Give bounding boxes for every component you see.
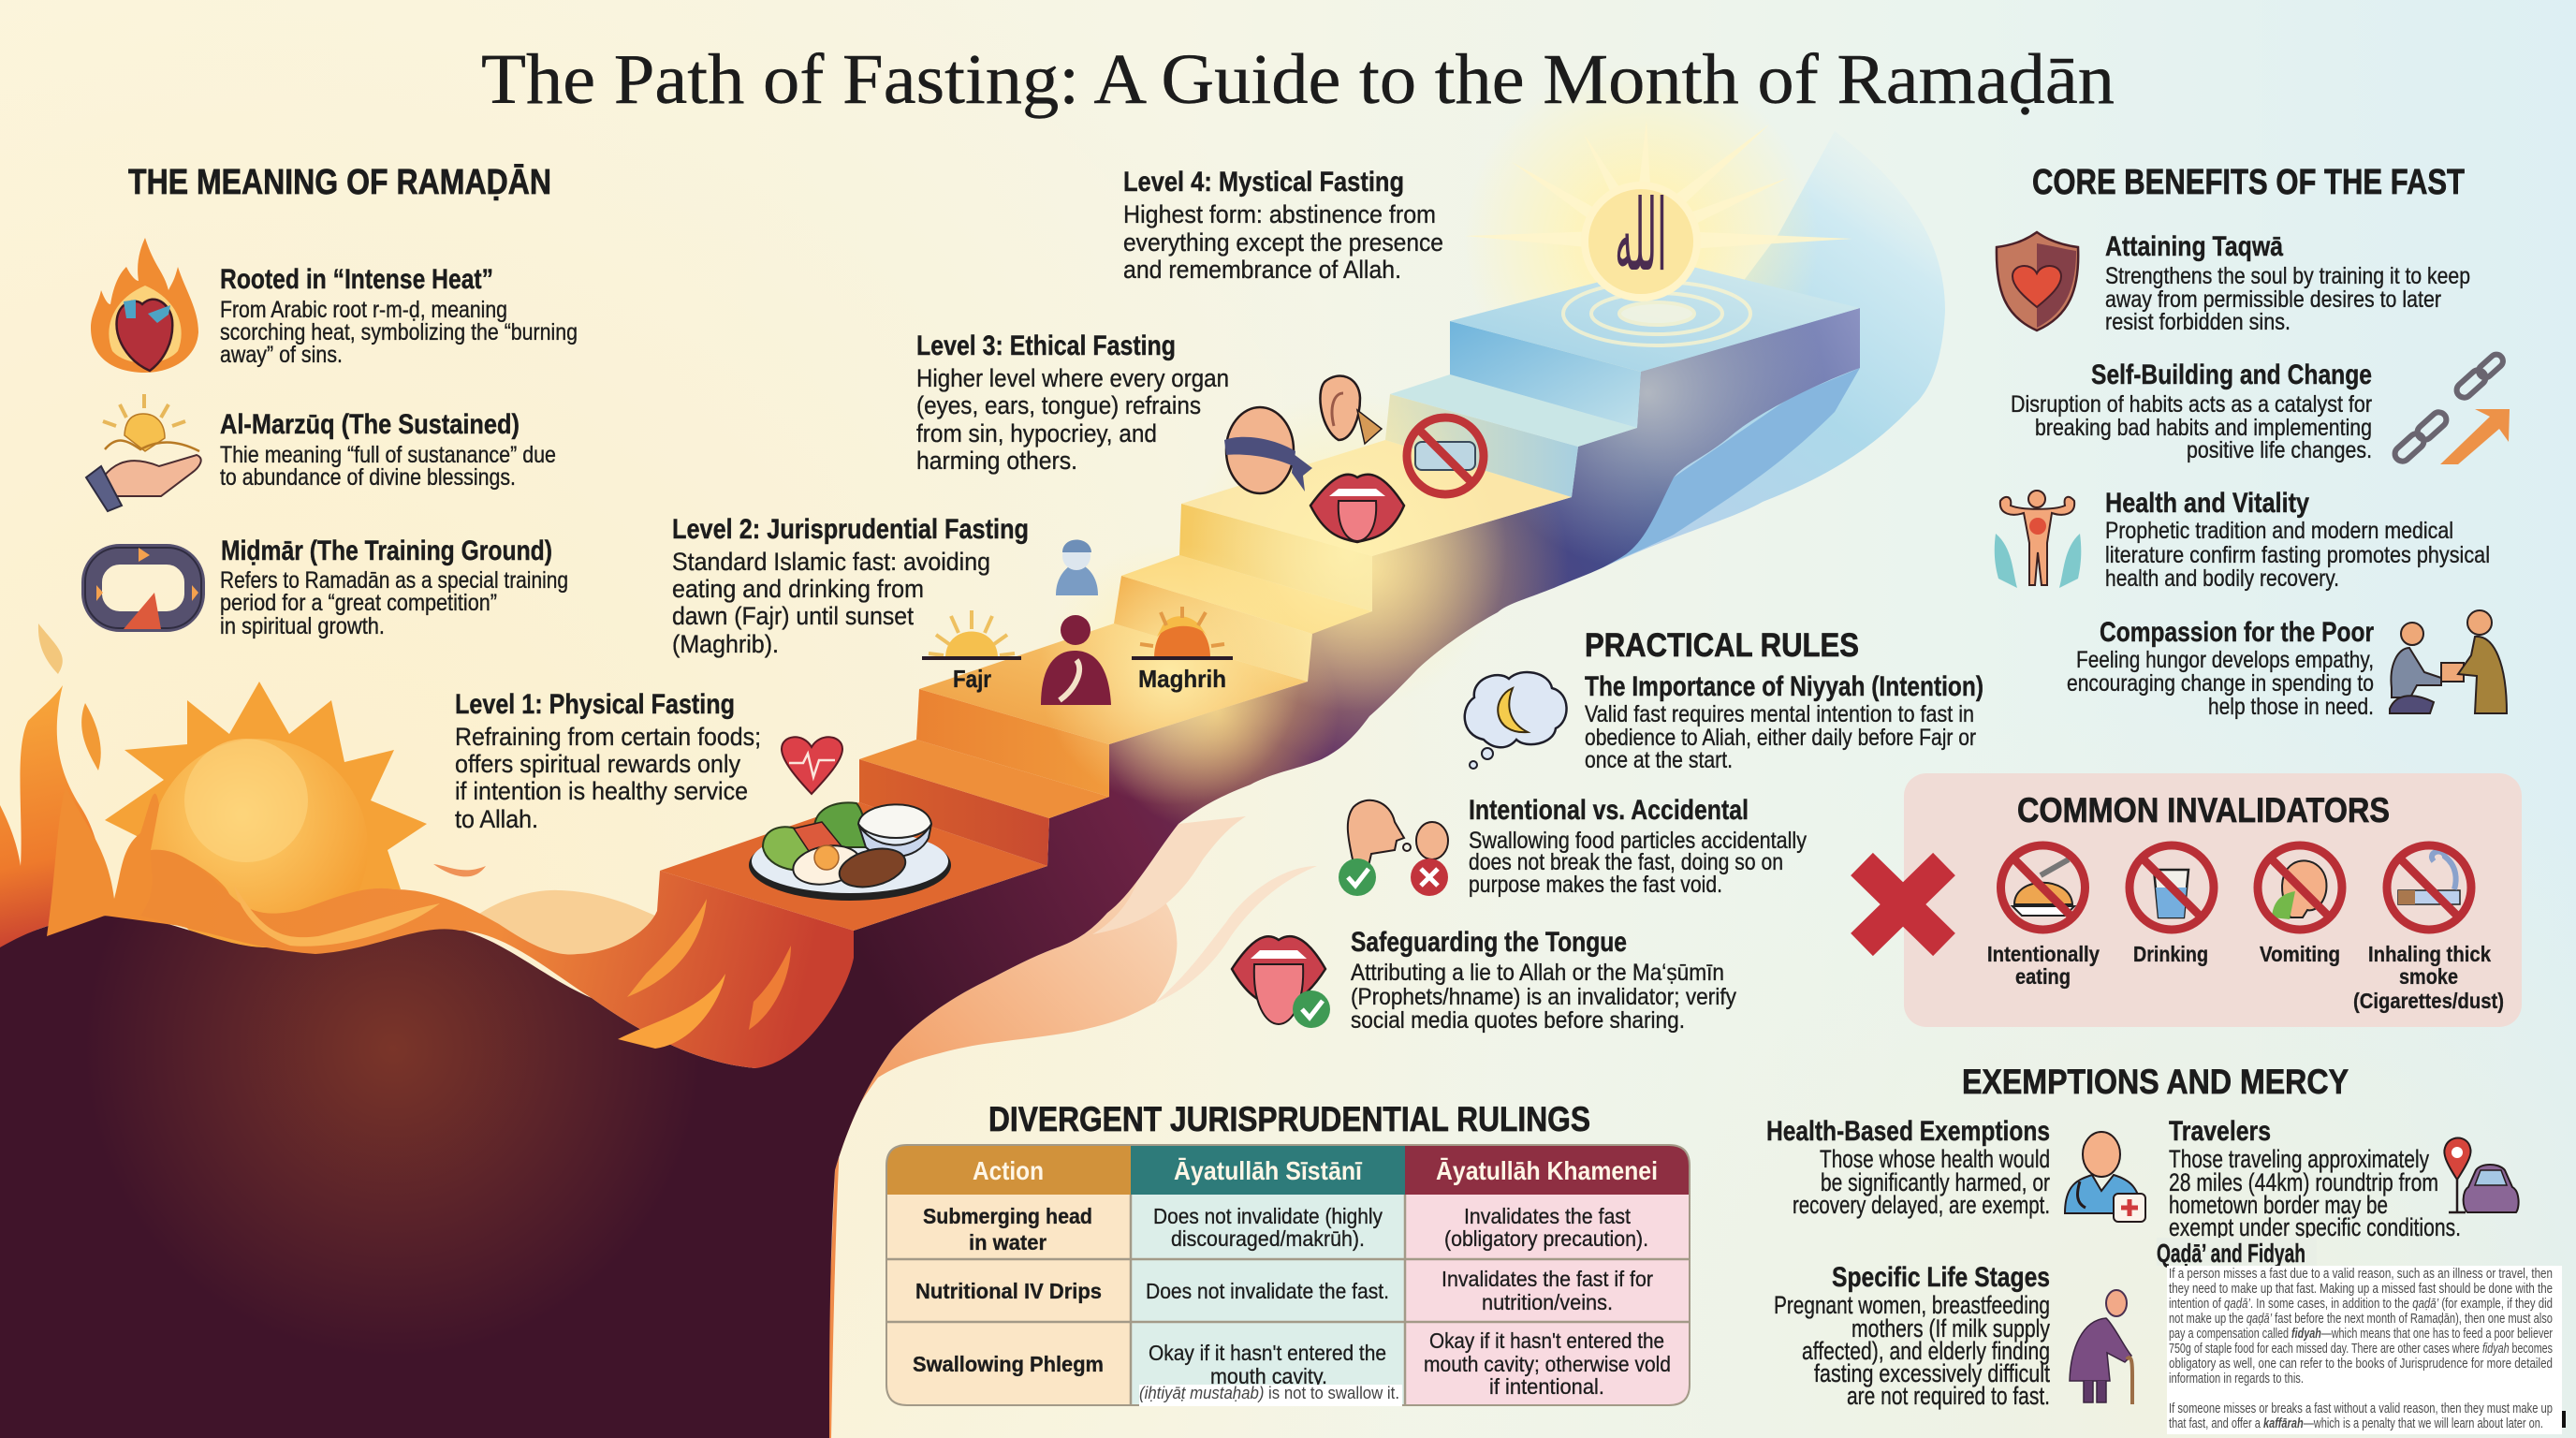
- icon: plate of food: [749, 802, 951, 901]
- block: midmar: Miḍmār (The Training Ground): [221, 536, 552, 566]
- title: The Path of Fasting: A Guide to the Month of Ramaḍān: [481, 40, 2115, 119]
- heading: DIVERGENT JURISPRUDENTIAL RULINGS: [988, 1100, 1590, 1138]
- block: level 1: if intention is healthy service: [455, 777, 748, 805]
- block: intentional vs accidental: does not break the fast, doing so on: [1469, 849, 1783, 875]
- panel: divergent rulings table: [886, 1100, 1690, 1406]
- step 5: [1179, 440, 1572, 611]
- row: submerging head: Invalidates the fast: [1464, 1204, 1632, 1228]
- block: travelers: Those traveling approximately: [2169, 1145, 2429, 1173]
- block: level 3: harming others.: [916, 447, 1077, 475]
- block: rooted in intense heat: From Arabic root r-m-ḍ, meaning: [220, 297, 507, 323]
- block: self-building: positive life changes.: [2187, 437, 2372, 463]
- block: level 4: Level 4: Mystical Fasting: [1123, 167, 1404, 198]
- icon: large red cross: [1862, 864, 1944, 945]
- block: safeguarding the tongue: Safeguarding the Tongue: [1351, 927, 1627, 958]
- block: level 2: Standard Islamic fast: avoiding: [672, 548, 990, 576]
- block: health: health and bodily recovery.: [2105, 565, 2339, 592]
- step 1: [660, 802, 1047, 931]
- block: travelers: [2169, 1116, 2461, 1241]
- note: recommended precaution patch: (iḥtiyāṭ mustaḥab) is not to swallow it.: [1139, 1384, 1399, 1402]
- block: health: literature confirm fasting promotes physical: [2105, 542, 2490, 568]
- block: niyyah: obedience to Aliah, either daily before Fajr or: [1585, 725, 1976, 751]
- note: white box on qada and fidyah: information in regards to this.: [2169, 1371, 2304, 1387]
- block: taqwa: Attaining Taqwā: [2105, 231, 2283, 262]
- block: level 2: eating and drinking from: [672, 575, 924, 603]
- text: intentionally eating: Intentionally: [1987, 942, 2100, 966]
- block: level 2: [672, 514, 1029, 658]
- illustration: blue swoosh behind stairs: [1554, 131, 1945, 588]
- block: specific life stages: affected), and elderly finding: [1802, 1337, 2050, 1365]
- block: taqwa: away from permissible desires to later: [2105, 286, 2441, 313]
- block: self-building: [2011, 360, 2372, 463]
- block: level 1: to Allah.: [455, 805, 538, 833]
- block: safeguarding the tongue: social media quotes before sharing.: [1351, 1007, 1685, 1034]
- heading: PRACTICAL RULES: [1585, 627, 1859, 664]
- note: white box on qada and fidyah: [2167, 1266, 2562, 1434]
- block: health: Prophetic tradition and modern medical: [2105, 518, 2453, 544]
- row: submerging head: in water: [969, 1230, 1046, 1255]
- panel: exemptions and mercy: [1766, 1063, 2566, 1434]
- row: nutritional IV drips: [915, 1267, 1653, 1314]
- text: intentionally eating: [1987, 942, 2100, 989]
- row: swallowing phlegm: mouth cavity; otherwise vold: [1424, 1352, 1671, 1376]
- icon: Fajr sun: Fajr: [953, 665, 991, 693]
- block: specific life stages: are not required to fast.: [1847, 1382, 2050, 1410]
- block: level 3: [916, 330, 1229, 475]
- block: travelers: 28 miles (44km) roundtrip from: [2169, 1168, 2438, 1196]
- block: level 1: [455, 689, 761, 833]
- icon: Allah medallion: [1585, 178, 1697, 298]
- row: swallowing phlegm: Okay if it hasn't entered the: [1429, 1328, 1664, 1353]
- block: rooted in intense heat: scorching heat, symbolizing the “burning: [220, 319, 578, 345]
- table header: [973, 1156, 1658, 1185]
- text: intentionally eating: eating: [2015, 964, 2071, 989]
- icon: shield: [1997, 232, 2078, 330]
- block: travelers: hometown border may be: [2169, 1191, 2388, 1219]
- icon: praying person: [1041, 615, 1111, 705]
- block: health: [2105, 488, 2490, 592]
- block: self-building: breaking bad habits and implementing: [2035, 415, 2372, 441]
- block: level 3: (eyes, ears, tongue) refrains: [916, 391, 1201, 419]
- illustration: flames: [0, 685, 229, 947]
- block: health-based exemptions: Those whose health would: [1820, 1145, 2050, 1173]
- icon: mouth with check: [1232, 936, 1330, 1028]
- row: submerging head: (obligatory precaution).: [1444, 1226, 1648, 1251]
- icon: giving to the poor: [2390, 610, 2507, 713]
- block: taqwa: resist forbidden sins.: [2105, 309, 2291, 335]
- block: intentional vs accidental: [1469, 795, 1807, 898]
- block: compassion: Feeling hungor develops empathy,: [2076, 647, 2374, 673]
- block: travelers: exempt under specific conditions.: [2169, 1213, 2461, 1241]
- block: taqwa: [2105, 231, 2470, 335]
- step 7: [1450, 262, 1860, 428]
- icon: no smoking: [2387, 845, 2471, 930]
- row: nutritional IV drips: nutrition/veins.: [1482, 1290, 1613, 1314]
- block: level 4: and remembrance of Allah.: [1123, 256, 1401, 284]
- table grid: [886, 1145, 1690, 1405]
- block: rooted in intense heat: away” of sins.: [220, 342, 343, 368]
- text: vomiting: Vomiting: [2260, 942, 2340, 966]
- icon: pin and car: [2444, 1138, 2519, 1212]
- block: compassion: help those in need.: [2208, 694, 2374, 720]
- icon: medic: [2065, 1132, 2145, 1222]
- block: specific life stages: fasting excessively difficult: [1814, 1359, 2050, 1387]
- text: drinking: Drinking: [2133, 942, 2208, 966]
- panel: practical rules: [1232, 627, 1983, 1034]
- patch: grey strip behind Qada heading: [2157, 1238, 2317, 1266]
- block: health-based exemptions: [1766, 1116, 2050, 1219]
- icon: race track: [85, 548, 201, 629]
- heading: THE MEANING OF RAMAḌĀN: [128, 163, 551, 202]
- illustration: orange flame flow: [38, 624, 854, 1068]
- illustration: staircase: [660, 262, 1860, 931]
- row: swallowing phlegm: [913, 1328, 1671, 1399]
- block: level 1: Level 1: Physical Fasting: [455, 689, 735, 720]
- block: level 1: Refraining from certain foods;: [455, 723, 761, 751]
- block: midmar: period for a “great competition”: [220, 590, 497, 616]
- icon: mouth with tongue: [1310, 475, 1404, 542]
- row: submerging head: [923, 1204, 1648, 1255]
- heading: CORE BENEFITS OF THE FAST: [2032, 163, 2465, 202]
- block: al-marzuq: to abundance of divine blessings.: [220, 464, 516, 491]
- heading: Qada and Fidyah: Qaḍā’ and Fidyah: [2157, 1239, 2305, 1268]
- heading: EXEMPTIONS AND MERCY: [1962, 1063, 2349, 1101]
- row: submerging head: discouraged/makrūh).: [1171, 1226, 1365, 1251]
- block: travelers: Travelers: [2169, 1116, 2271, 1147]
- block: level 3: Higher level where every organ: [916, 364, 1229, 392]
- step 2: [859, 740, 1109, 866]
- block: midmar: Refers to Ramadān as a special training: [220, 567, 568, 594]
- icon: heart in flame: [91, 238, 198, 373]
- note: white box on qada and fidyah: intention of qaḍā’. In some cases, in addition to the qaḍā’ (for example, if they did: [2169, 1296, 2553, 1312]
- block: health: Health and Vitality: [2105, 488, 2309, 519]
- block: specific life stages: Pregnant women, breastfeeding: [1774, 1291, 2050, 1319]
- block: midmar: [220, 536, 568, 639]
- block: level 2: dawn (Fajr) until sunset: [672, 602, 914, 630]
- text: inhaling thick smoke: Inhaling thick: [2368, 942, 2491, 966]
- illustration: sun at the base: [105, 682, 427, 956]
- panel: meaning of Ramadan: [85, 163, 578, 639]
- block: health-based exemptions: Health-Based Exemptions: [1766, 1116, 2050, 1147]
- icon: no drinking: [2130, 845, 2214, 930]
- icon: no vomiting: [2258, 845, 2342, 930]
- block: intentional vs accidental: Intentional vs. Accidental: [1469, 795, 1749, 826]
- icon: two heads with check and cross: [1339, 800, 1448, 896]
- block: safeguarding the tongue: (Prophets/hname) is an invalidator; verify: [1351, 984, 1736, 1010]
- block: level 3: from sin, hypocriey, and: [916, 419, 1157, 448]
- row: swallowing phlegm: mouth cavity.: [1210, 1364, 1327, 1388]
- block: safeguarding the tongue: [1351, 927, 1736, 1034]
- step 6: [1385, 374, 1637, 497]
- block: level 2: (Maghrib).: [672, 630, 779, 658]
- block: self-building: Self-Building and Change: [2091, 360, 2372, 390]
- row: swallowing phlegm: Okay if it hasn't entered the: [1149, 1341, 1386, 1365]
- icon: prohibition: [1407, 418, 1484, 494]
- step 3: [916, 624, 1308, 797]
- block: taqwa: Strengthens the soul by training it to keep: [2105, 263, 2470, 289]
- illustration: dark ribbon under the stairs: [0, 215, 1860, 1438]
- heading: COMMON INVALIDATORS: [2017, 791, 2390, 829]
- block: niyyah: The Importance of Niyyah (Intention): [1585, 671, 1983, 702]
- icon: Allah medallion: الله: [1615, 178, 1667, 293]
- block: al-marzuq: Thie meaning “full of sustanance” due: [220, 442, 556, 468]
- block: specific life stages: mothers (If milk supply: [1852, 1314, 2050, 1343]
- illustration: peach ribbon: [824, 816, 1317, 1438]
- block: safeguarding the tongue: Attributing a lie to Allah or the Ma‘ṣūmīn: [1351, 960, 1724, 986]
- block: level 1: offers spiritual rewards only: [455, 750, 740, 778]
- icon: healthy body: [1995, 491, 2081, 588]
- row: swallowing phlegm: Swallowing Phlegm: [913, 1352, 1104, 1376]
- block: compassion: Compassion for the Poor: [2100, 617, 2374, 648]
- row: swallowing phlegm: if intentional.: [1489, 1374, 1604, 1399]
- block: level 4: Highest form: abstinence from: [1123, 200, 1436, 228]
- block: self-building: Disruption of habits acts as a catalyst for: [2011, 391, 2372, 418]
- block: midmar: in spiritual growth.: [220, 613, 385, 639]
- illustration: Allah sun glow and rays: [1463, 64, 1852, 419]
- icon: elder with cane: [2070, 1290, 2132, 1404]
- block: rooted in intense heat: Rooted in “Intense Heat”: [220, 264, 493, 295]
- row: nutritional IV drips: Nutritional IV Drips: [915, 1279, 1102, 1303]
- icon: Fajr sun: [922, 610, 1021, 693]
- block: niyyah: [1585, 671, 1983, 773]
- block: health-based exemptions: be significantly harmed, or: [1821, 1168, 2050, 1196]
- block: level 2: Level 2: Jurisprudential Fasting: [672, 514, 1029, 545]
- table header: Action: [973, 1156, 1044, 1185]
- illustration: peach hill: [468, 890, 655, 974]
- row: submerging head: Submerging head: [923, 1204, 1092, 1228]
- block: level 3: Level 3: Ethical Fasting: [916, 330, 1176, 361]
- panel: common invalidators: [1862, 773, 2522, 1027]
- block: rooted in intense heat: [220, 264, 578, 368]
- block: intentional vs accidental: Swallowing food particles accidentally: [1469, 828, 1807, 854]
- panel: core benefits: [1995, 163, 2510, 720]
- icon: Maghrib sun: Maghrih: [1138, 665, 1226, 693]
- block: niyyah: once at the start.: [1585, 747, 1733, 773]
- icon: ear: [1320, 376, 1382, 444]
- block: specific life stages: Specific Life Stages: [1832, 1262, 2050, 1293]
- block: al-marzuq: Al-Marzūq (The Sustained): [220, 409, 520, 440]
- row: submerging head: Does not invalidate (highly: [1153, 1204, 1383, 1228]
- block: specific life stages: [1774, 1262, 2050, 1410]
- block: level 4: [1123, 167, 1443, 284]
- block: compassion: [2067, 617, 2374, 720]
- row: nutritional IV drips: Does not invalidate the fast.: [1146, 1279, 1389, 1303]
- icon: blue person: [1056, 539, 1098, 595]
- step 4: [1114, 555, 1372, 682]
- icon: thought cloud with moon: [1465, 672, 1567, 769]
- row: nutritional IV drips: Invalidates the fast if for: [1442, 1267, 1653, 1291]
- black bar fragment: [2562, 1411, 2566, 1428]
- icon: blindfolded head: [1224, 407, 1312, 493]
- block: intentional vs accidental: purpose makes the fast void.: [1469, 872, 1722, 898]
- block: compassion: encouraging change in spending to: [2067, 670, 2374, 697]
- block: health-based exemptions: recovery delayed, are exempt.: [1793, 1191, 2050, 1219]
- table header: Āyatullāh Sīstānī: [1174, 1156, 1363, 1185]
- block: niyyah: Valid fast requires mental intention to fast in: [1585, 701, 1974, 727]
- block: al-marzuq: [220, 409, 556, 491]
- text: inhaling thick smoke: smoke: [2399, 964, 2458, 989]
- block: level 4: everything except the presence: [1123, 228, 1443, 257]
- text: inhaling thick smoke: [2353, 942, 2504, 1013]
- icon: sun over hand: [86, 394, 201, 511]
- icon: no eating: [2001, 845, 2086, 930]
- icon: broken chain and arrow: [2392, 352, 2510, 464]
- text: inhaling thick smoke: (Cigarettes/dust): [2353, 989, 2504, 1013]
- icon: heart with pulse: [782, 737, 842, 794]
- table header: Āyatullāh Khamenei: [1436, 1156, 1658, 1185]
- icon: Maghrib sun: [1132, 607, 1233, 693]
